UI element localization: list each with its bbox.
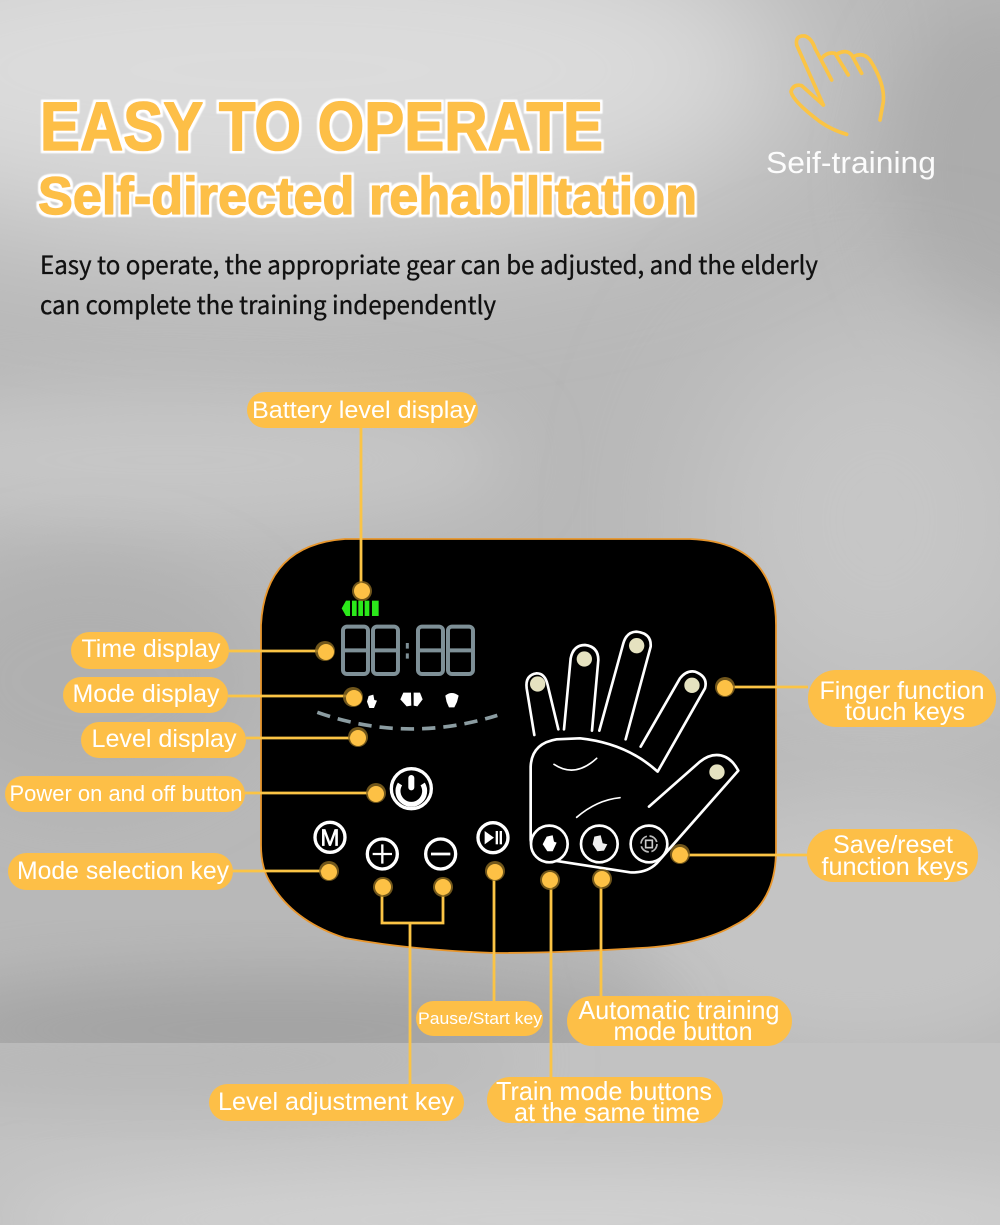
label: battery level display: [247, 392, 478, 428]
label: finger function keys: [808, 670, 996, 727]
label: save reset keys: Save/reset: [833, 831, 953, 859]
plus button: [367, 839, 397, 869]
M button: [315, 822, 345, 852]
label: power button: [5, 776, 245, 812]
marker dots: [315, 581, 735, 897]
battery indicator: [342, 601, 379, 616]
power button: [391, 769, 431, 809]
intro text: [40, 246, 818, 322]
label: power button: Power on and off button: [10, 781, 242, 806]
label: automatic training mode button: [567, 995, 792, 1046]
leader lines: [228, 428, 808, 1084]
label: level display: Level display: [92, 725, 237, 753]
intro text: can complete the training independently: [40, 286, 496, 322]
label: mode display: [63, 677, 228, 713]
M button: M: [321, 825, 339, 851]
subtitle: Self-directed rehabilitation: [38, 167, 697, 226]
label: mode selection key: Mode selection key: [17, 857, 229, 885]
time display digits: [343, 627, 473, 674]
label: automatic training mode button: mode button: [614, 1016, 752, 1046]
minus button: [426, 839, 456, 869]
label: train mode buttons: at the same time: [514, 1097, 700, 1127]
label: save reset keys: function keys: [822, 853, 968, 881]
label: train mode buttons: [487, 1076, 723, 1127]
label: pause start key: [416, 1001, 543, 1036]
label: finger function keys: Finger function: [820, 677, 984, 705]
label: battery level display: Battery level display: [252, 397, 476, 424]
label: save reset keys: [807, 829, 978, 882]
control panel device: [261, 539, 776, 953]
label: pause start key: Pause/Start key: [418, 1009, 543, 1028]
label: automatic training mode button: Automatic training: [578, 995, 780, 1025]
label: finger function keys: touch keys: [845, 698, 965, 726]
icon: pointing hand: [791, 36, 883, 134]
label: train mode buttons: Train mode buttons: [496, 1076, 712, 1106]
hand touch panel: [526, 632, 738, 872]
label: mode display: Mode display: [72, 680, 220, 708]
level arc: [317, 712, 497, 729]
label: time display: Time display: [82, 635, 221, 663]
mode display icons: [367, 693, 459, 708]
icon caption: Seif-training: [766, 145, 936, 180]
label: time display: [71, 632, 229, 669]
intro text: Easy to operate, the appropriate gear can be adjusted, and the elderly: [40, 246, 818, 282]
label: level adjustment key: [209, 1084, 464, 1121]
title: EASY TO OPERATE: [40, 88, 603, 165]
background floor: [0, 1123, 1000, 1225]
buttons: [315, 769, 508, 869]
play pause button: [478, 823, 508, 853]
label: level display: [81, 722, 246, 758]
label: level adjustment key: Level adjustment key: [218, 1088, 454, 1116]
